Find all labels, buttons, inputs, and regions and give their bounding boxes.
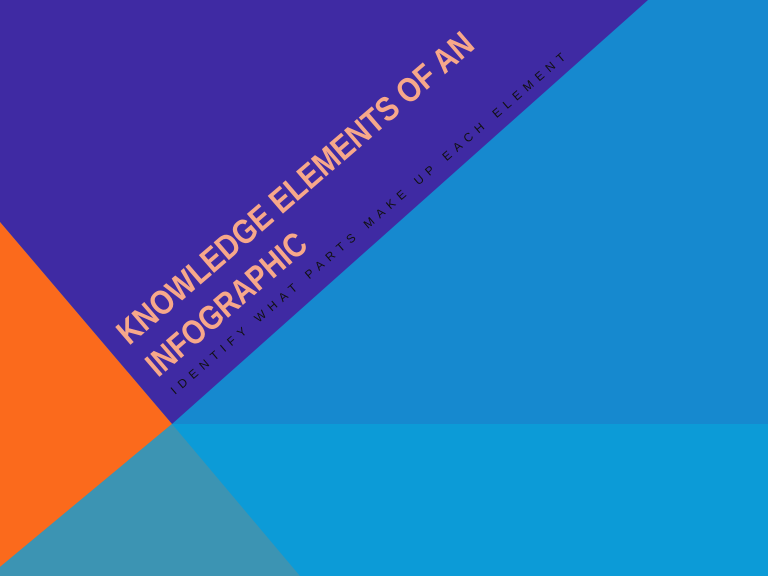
- panel: purple triangle: [0, 0, 648, 424]
- panel: orange triangle: [0, 222, 172, 567]
- background: lower light blue: [0, 424, 768, 576]
- subtitle: IDENTIFY WHAT PARTS MAKE UP EACH ELEMENT: [168, 48, 571, 397]
- panel: teal bottom triangle: [0, 424, 300, 576]
- title line 2: INFOGRAPHIC: [138, 225, 315, 384]
- background: upper blue: [0, 0, 768, 424]
